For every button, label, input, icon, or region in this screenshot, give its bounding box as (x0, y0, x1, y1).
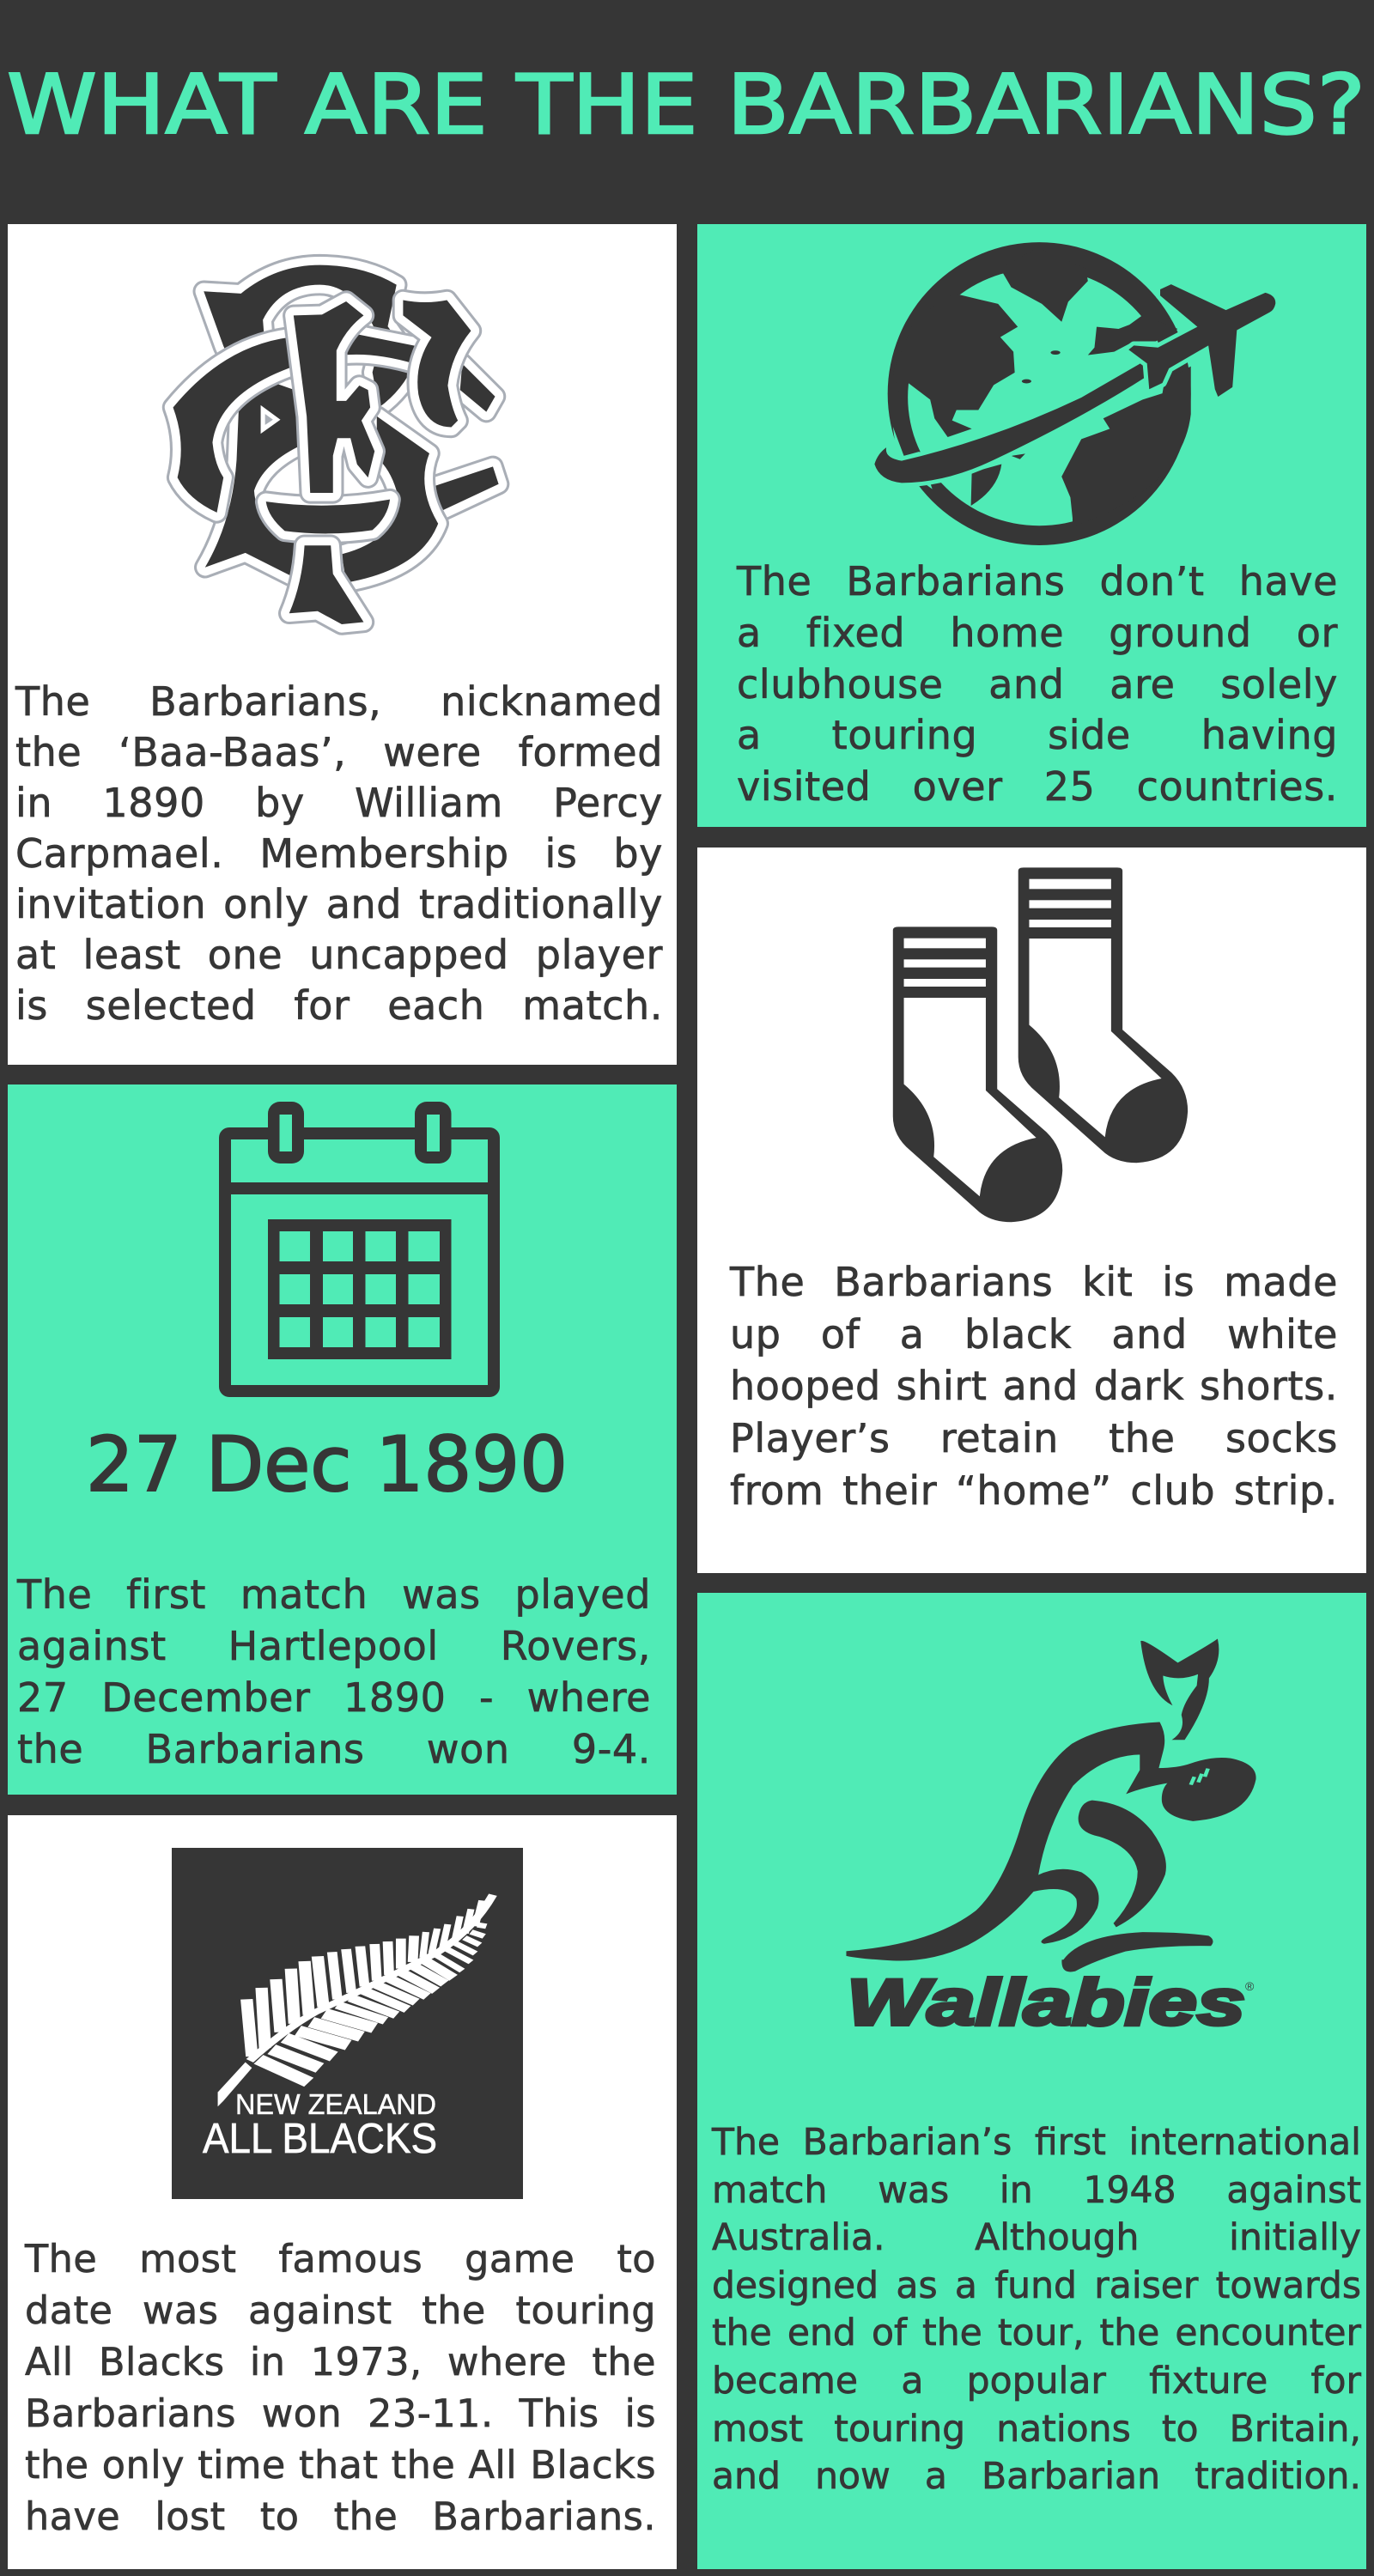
text: origins (15, 678, 663, 1029)
icon: Barbarians crest (161, 254, 510, 635)
Wallabies wordmark: Wallabies (847, 1966, 1245, 2039)
text: kit: Player’s retain the socks (730, 1415, 1338, 1461)
text: first match: 27 December 1890 - where (17, 1674, 651, 1721)
panel: touring side (697, 224, 1366, 827)
text: All Blacks game: the only time that the All Blacks (25, 2444, 656, 2488)
text: first international: match was in 1948 against (712, 2170, 1361, 2212)
date heading: 27 Dec 1890 (86, 1420, 568, 1509)
text: kit: from their “home” club strip. (730, 1467, 1338, 1514)
text: All Blacks game: have lost to the Barbarians. (25, 2495, 656, 2539)
icon: All Blacks logo: NEW ZEALAND (235, 2088, 436, 2120)
panel: All Blacks (8, 1815, 677, 2569)
text: kit: up of a black and white (730, 1311, 1338, 1358)
text: touring (737, 558, 1338, 810)
panel: first international (697, 1593, 1366, 2569)
icon: kangaroo (847, 1640, 1255, 1971)
text: touring: a touring side having (737, 712, 1338, 758)
text: kit (730, 1259, 1338, 1514)
text: origins: is selected for each match. (15, 982, 663, 1029)
text: first international: most touring nations to Britain, (712, 2409, 1361, 2451)
text: touring: visited over 25 countries. (737, 763, 1338, 810)
text: origins: The Barbarians, nicknamed (15, 678, 663, 725)
text: kit: The Barbarians kit is made (730, 1259, 1338, 1305)
text: first international: became a popular fixture for (712, 2360, 1361, 2403)
text: first international: and now a Barbarian tradition. (712, 2456, 1361, 2498)
icon: All Blacks logo (172, 1848, 523, 2199)
text: first match: the Barbarians won 9-4. (17, 1726, 651, 1772)
text: first international (711, 2122, 1362, 2498)
text: All Blacks game: Barbarians won 23-11. This is (25, 2392, 656, 2436)
panel: first match (8, 1084, 677, 1795)
icon: globe and plane (874, 242, 1276, 545)
icon: socks (893, 867, 1189, 1223)
text: origins: invitation only and traditionally (15, 881, 663, 927)
text: first international: The Barbarian’s first international (712, 2122, 1361, 2164)
text: origins: Carpmael. Membership is by (15, 830, 663, 877)
text: touring: The Barbarians don’t have (737, 558, 1338, 605)
icon: Wallabies logo: ® (1245, 1979, 1255, 1993)
title: WHAT ARE THE BARBARIANS? (7, 58, 1365, 153)
text: first match: against Hartlepool Rovers, (17, 1623, 651, 1669)
text: first international: Australia. Although initially (712, 2217, 1361, 2259)
text: first match (17, 1571, 651, 1772)
icon: silver fern (218, 1895, 493, 2106)
text: origins: in 1890 by William Percy (15, 780, 663, 826)
text: first match: The first match was played (17, 1571, 651, 1618)
panel: kit (697, 848, 1366, 1573)
icon: All Blacks logo: ALL BLACKS (203, 2116, 437, 2162)
icon: calendar (219, 1102, 500, 1397)
text: All Blacks game: All Blacks in 1973, where the (25, 2341, 656, 2385)
icon: right sock (1018, 867, 1188, 1163)
icon: Wallabies logo (846, 1638, 1256, 2039)
text: touring: a fixed home ground or (737, 610, 1338, 656)
text: kit: hooped shirt and dark shorts. (730, 1363, 1338, 1409)
text: All Blacks game (24, 2238, 656, 2539)
text: origins: the ‘Baa-Baas’, were formed (15, 729, 663, 775)
text: first international: the end of the tour, the encounter (712, 2312, 1361, 2354)
text: first international: designed as a fund raiser towards (712, 2265, 1361, 2307)
icon: left sock (893, 927, 1062, 1222)
text: touring: clubhouse and are solely (737, 661, 1338, 708)
text: All Blacks game: The most famous game to (25, 2238, 656, 2281)
text: origins: at least one uncapped player (15, 932, 663, 978)
text: All Blacks game: date was against the touring (25, 2289, 656, 2333)
panel: Barbarians origins (8, 224, 677, 1065)
